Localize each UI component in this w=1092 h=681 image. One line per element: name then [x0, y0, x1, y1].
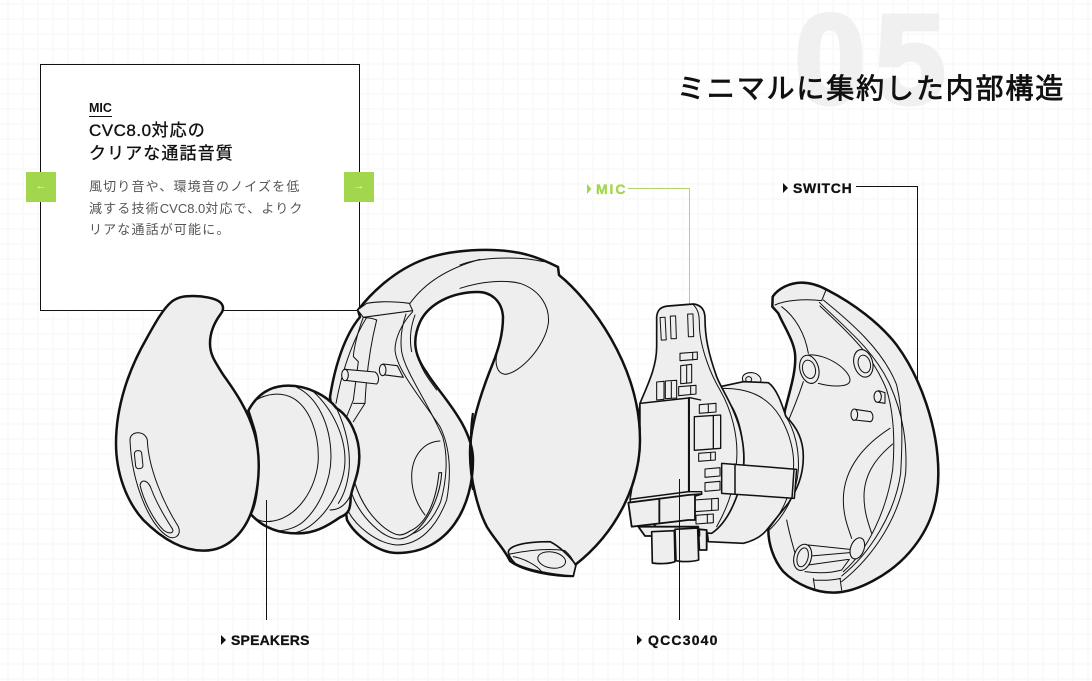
panel body text: 減する技術CVC8.0対応で、よりク [89, 200, 304, 216]
center housing [330, 250, 640, 576]
panel body text: 風切り音や、環境音のノイズを低 [89, 179, 300, 194]
processor block [630, 398, 702, 499]
lower connector block [628, 494, 707, 564]
marker triangle: switch [783, 183, 788, 193]
panel heading: CVC8.0対応の [89, 121, 206, 140]
panel body text [89, 179, 304, 237]
previous arrow button [26, 172, 56, 202]
next arrow button [344, 172, 374, 202]
circuit board [630, 304, 744, 533]
leader line: switch [856, 186, 918, 385]
marker triangle: mic [587, 184, 592, 194]
driver housing [700, 371, 803, 543]
marker triangle: speakers [221, 635, 226, 645]
callout label: SWITCH: SWITCH [793, 180, 852, 196]
panel heading: クリアな通話音質 [89, 144, 234, 163]
speaker driver [248, 386, 359, 533]
center housing: left lobe interior [336, 259, 480, 545]
callout label: QCC3040: QCC3040 [648, 632, 719, 648]
callout label: MIC: MIC [596, 181, 627, 197]
previous arrow button: ← [36, 180, 46, 192]
leader line: speakers [266, 500, 268, 620]
panel label: MIC: MIC [89, 101, 112, 115]
center housing: right lobe details [460, 258, 576, 576]
internal module: driver housing, circuit board and components [628, 304, 803, 564]
title: ミニマルに集約した内部構造 [677, 73, 1065, 104]
panel body text: リアな通話が可能に。 [89, 222, 231, 237]
marker triangle: QCC3040 [637, 635, 642, 645]
panel: feature description card [40, 64, 360, 311]
right cover shell [768, 283, 938, 593]
outer shell [116, 296, 259, 551]
panel heading [89, 121, 234, 163]
leader line: mic [628, 188, 690, 304]
strap [722, 463, 797, 498]
callout label: SPEAKERS: SPEAKERS [231, 632, 310, 648]
leader line: QCC3040 [678, 479, 680, 620]
next arrow button: → [354, 180, 364, 192]
